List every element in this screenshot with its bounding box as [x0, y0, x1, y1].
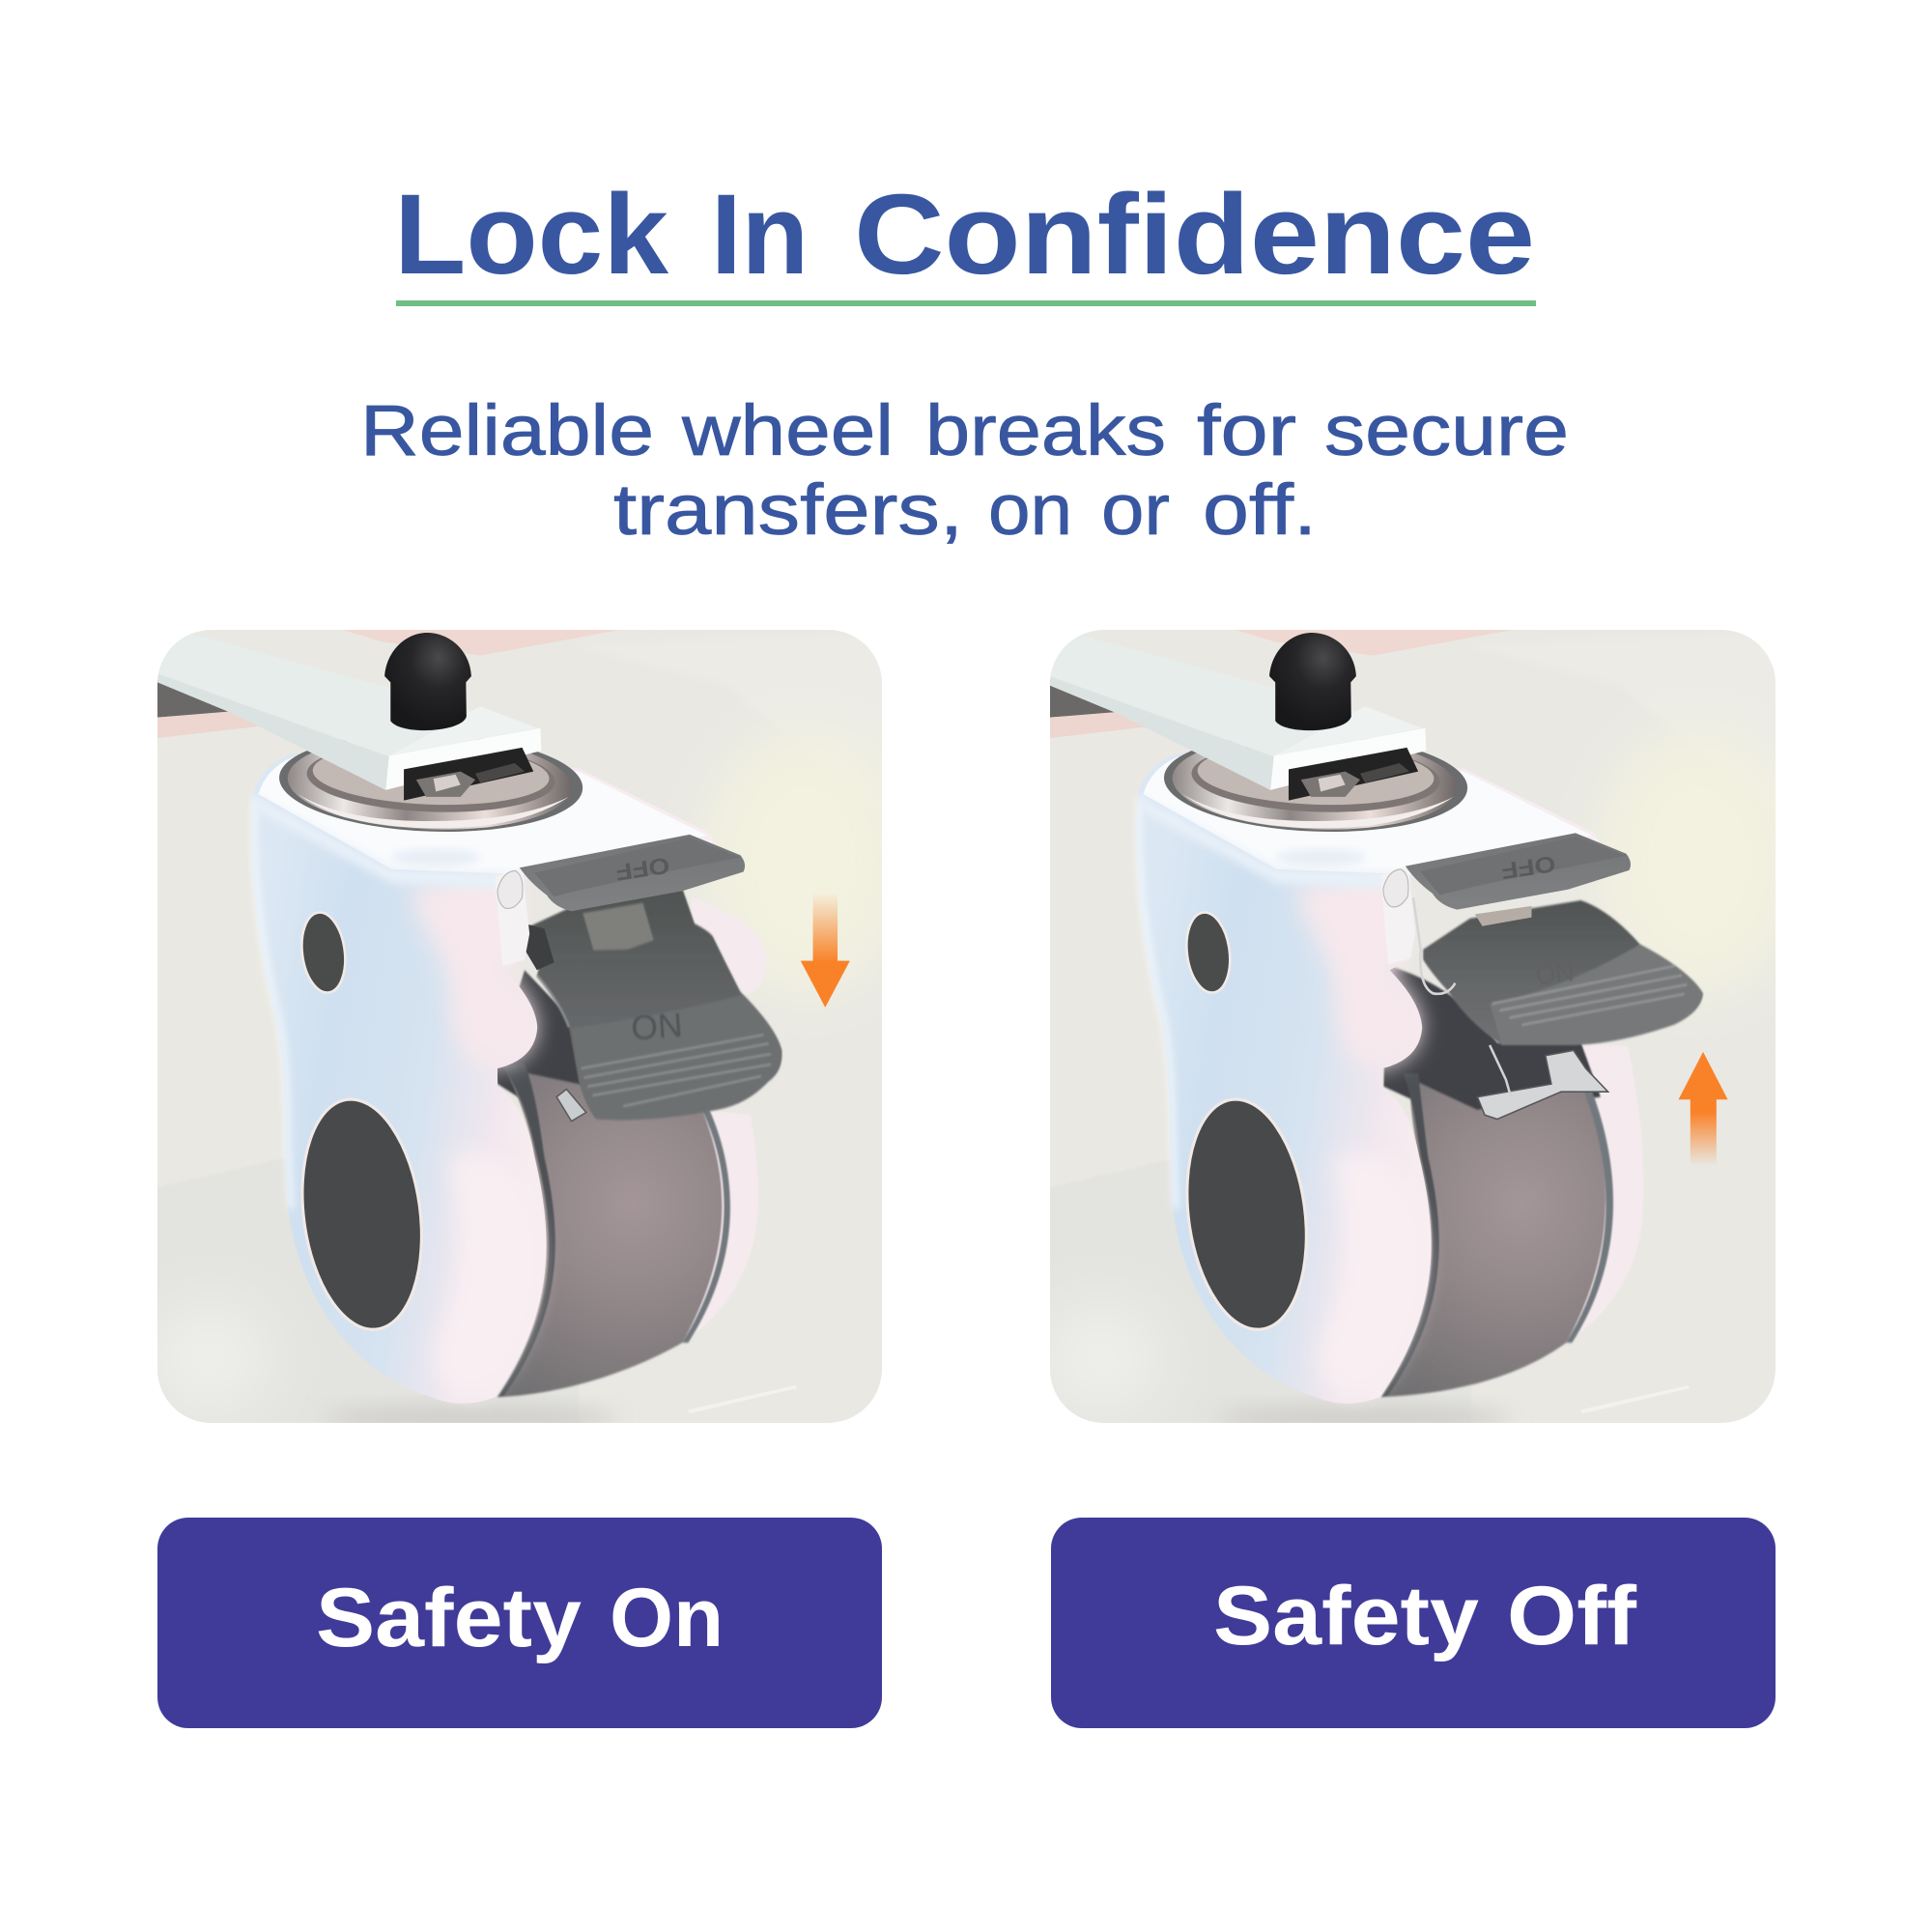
- panel background: [135, 618, 909, 1433]
- black knob: [1269, 633, 1356, 730]
- metal latch: [1477, 1045, 1608, 1120]
- title: Lock: [394, 171, 668, 298]
- mounting arm: [157, 674, 541, 801]
- right fork behind wheel: [1566, 1042, 1643, 1343]
- button: safety off: Safety: [1213, 1570, 1479, 1662]
- large hub cap: [301, 1097, 423, 1331]
- subtitle: for: [1197, 390, 1296, 470]
- right fork and side bump behind wheel: [692, 898, 767, 1332]
- panel: safety off caster photo: [1028, 618, 1802, 1433]
- button: safety off: [1051, 1518, 1776, 1728]
- small side hole: [1182, 909, 1235, 996]
- subtitle: [360, 390, 1569, 550]
- tab bracket: [582, 903, 654, 951]
- swivel ring: [279, 738, 583, 832]
- dark cavity beneath raised pedal: [1383, 965, 1601, 1125]
- button: safety on: On: [610, 1572, 724, 1664]
- button: safety off: Off: [1507, 1570, 1636, 1662]
- upper brake tab: OFF: [1500, 850, 1557, 883]
- subtitle: wheel: [681, 390, 894, 470]
- upper brake tab: OFF: [614, 852, 671, 885]
- subtitle: off.: [1203, 469, 1317, 550]
- panel: safety on caster photo: [135, 618, 909, 1433]
- brake pedal, raised: [1423, 900, 1703, 1045]
- metal clip: [556, 1089, 586, 1122]
- tab bracket: [1475, 906, 1532, 926]
- spring wire: [1413, 897, 1455, 994]
- title: [394, 171, 1535, 298]
- panel background: [1028, 618, 1802, 1433]
- subtitle: on: [988, 469, 1072, 550]
- large hub cap: [1174, 1091, 1320, 1338]
- hinge hardware: [525, 923, 554, 970]
- housing body: [1137, 753, 1602, 1404]
- subtitle: breaks: [925, 390, 1166, 470]
- upper brake tab: [495, 835, 745, 966]
- subtitle: or: [1101, 469, 1170, 550]
- wheel tire: [497, 1064, 730, 1397]
- subtitle: transfers,: [613, 469, 963, 550]
- wheel tire: [1381, 1073, 1613, 1397]
- button: safety on: [157, 1518, 882, 1728]
- title underline: [396, 300, 1536, 306]
- subtitle: Reliable: [360, 390, 654, 470]
- dark cavity behind pressed pedal: [497, 970, 581, 1098]
- housing body: [252, 753, 717, 1404]
- subtitle: secure: [1324, 390, 1569, 470]
- arrow: lift up: [1679, 1052, 1728, 1166]
- brake pedal, raised: ON: [1534, 955, 1576, 990]
- swivel ring: [1162, 728, 1469, 837]
- arrow: press down: [801, 893, 850, 1008]
- button: safety on: Safety: [316, 1572, 582, 1664]
- small side hole: [300, 911, 347, 994]
- brake pedal, pressed down: ON: [630, 1007, 684, 1048]
- title: In: [711, 171, 809, 298]
- black knob: [384, 633, 471, 730]
- brake pedal, pressed down: [525, 889, 782, 1120]
- title: Confidence: [854, 171, 1535, 298]
- mounting arm: [1039, 631, 1426, 801]
- upper brake tab: [1380, 833, 1631, 964]
